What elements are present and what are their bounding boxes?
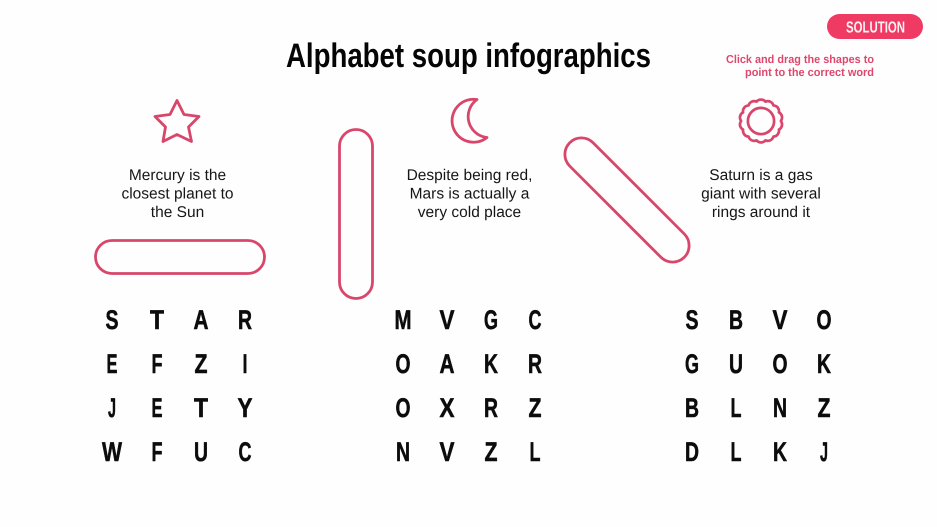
letter grid: middle: V	[440, 437, 454, 467]
letter grid: middle: L	[530, 437, 540, 467]
letter grid: right: G	[685, 349, 699, 379]
solution button	[827, 14, 923, 39]
letter grid: right: S	[686, 305, 698, 335]
letter grid: middle: R	[484, 393, 498, 423]
letter grid: middle: Z	[528, 393, 542, 423]
text: Mars: Despite being red,	[407, 167, 532, 184]
instruction text	[726, 54, 874, 79]
letter grid: right: J	[820, 437, 828, 467]
letter grid: right: L	[730, 393, 742, 423]
text: Saturn	[701, 167, 821, 221]
letter grid: left: F	[152, 349, 162, 379]
letter grid: right: L	[730, 437, 742, 467]
letter grid: middle: C	[528, 305, 542, 335]
instruction text: point to the correct word	[745, 67, 874, 79]
instruction text: Click and drag the shapes to	[726, 54, 874, 66]
letter grid: right: O	[816, 305, 832, 335]
letter grid: right: B	[685, 393, 699, 423]
letter grid: left: E	[152, 393, 162, 423]
letter grid: left: I	[242, 349, 248, 379]
letter grid: left: A	[194, 305, 208, 335]
text: Mercury: Mercury is the	[129, 167, 226, 184]
text: Mercury: closest planet to	[121, 186, 234, 202]
letter grid: left: F	[152, 437, 162, 467]
letter grid: right: B	[729, 305, 743, 335]
text: Mars: very cold place	[418, 204, 521, 221]
letter grid: left: S	[106, 305, 118, 335]
letter grid: middle	[394, 305, 542, 467]
text: Mercury: the Sun	[151, 204, 204, 221]
letter grid: left: J	[108, 393, 116, 423]
letter grid: right: Z	[818, 393, 830, 423]
letter grid: middle: K	[484, 349, 498, 379]
letter grid: middle: Z	[484, 437, 498, 467]
letter grid: left: R	[238, 305, 252, 335]
letter grid: left: Y	[238, 393, 252, 423]
draggable pill: diagonal	[558, 131, 696, 269]
letter grid: right: K	[773, 437, 787, 467]
letter grid: middle: G	[484, 305, 498, 335]
letter grid: left: W	[102, 437, 122, 467]
letter grid: right: N	[773, 393, 787, 423]
text: Saturn: giant with several	[701, 186, 821, 202]
text: Saturn: rings around it	[712, 204, 811, 221]
letter grid: right	[685, 305, 832, 467]
letter grid: middle: A	[440, 349, 454, 379]
letter grid: left: Z	[194, 349, 208, 379]
draggable pill: vertical	[340, 130, 372, 298]
letter grid: left: E	[106, 349, 118, 379]
icon: crescent moon	[452, 99, 487, 142]
letter grid: right: V	[772, 305, 788, 335]
letter grid: right: K	[817, 349, 831, 379]
letter grid: middle: V	[440, 305, 454, 335]
icon: star	[155, 100, 199, 142]
letter grid: left: U	[194, 437, 208, 467]
letter grid: left: T	[150, 305, 164, 335]
letter grid: middle: R	[528, 349, 542, 379]
text: Mercury	[121, 167, 234, 221]
letter grid: middle: N	[396, 437, 410, 467]
text: Saturn: Saturn is a gas	[709, 167, 813, 184]
text: Mars: Mars is actually a	[410, 186, 530, 202]
text: Mars	[407, 167, 532, 221]
letter grid: left: T	[194, 393, 208, 423]
solution button: SOLUTION	[846, 20, 905, 36]
letter grid: middle: M	[394, 305, 412, 335]
letter grid: middle: O	[396, 393, 410, 423]
letter grid: left	[102, 305, 252, 467]
letter grid: middle: O	[396, 349, 410, 379]
letter grid: right: U	[729, 349, 743, 379]
letter grid: right: O	[772, 349, 788, 379]
icon: scalloped ring	[740, 100, 782, 142]
letter grid: left: C	[238, 437, 252, 467]
title: Alphabet soup infographics	[286, 37, 651, 75]
letter grid: right: D	[685, 437, 699, 467]
draggable pill: horizontal	[96, 240, 264, 274]
letter grid: middle: X	[440, 393, 454, 423]
